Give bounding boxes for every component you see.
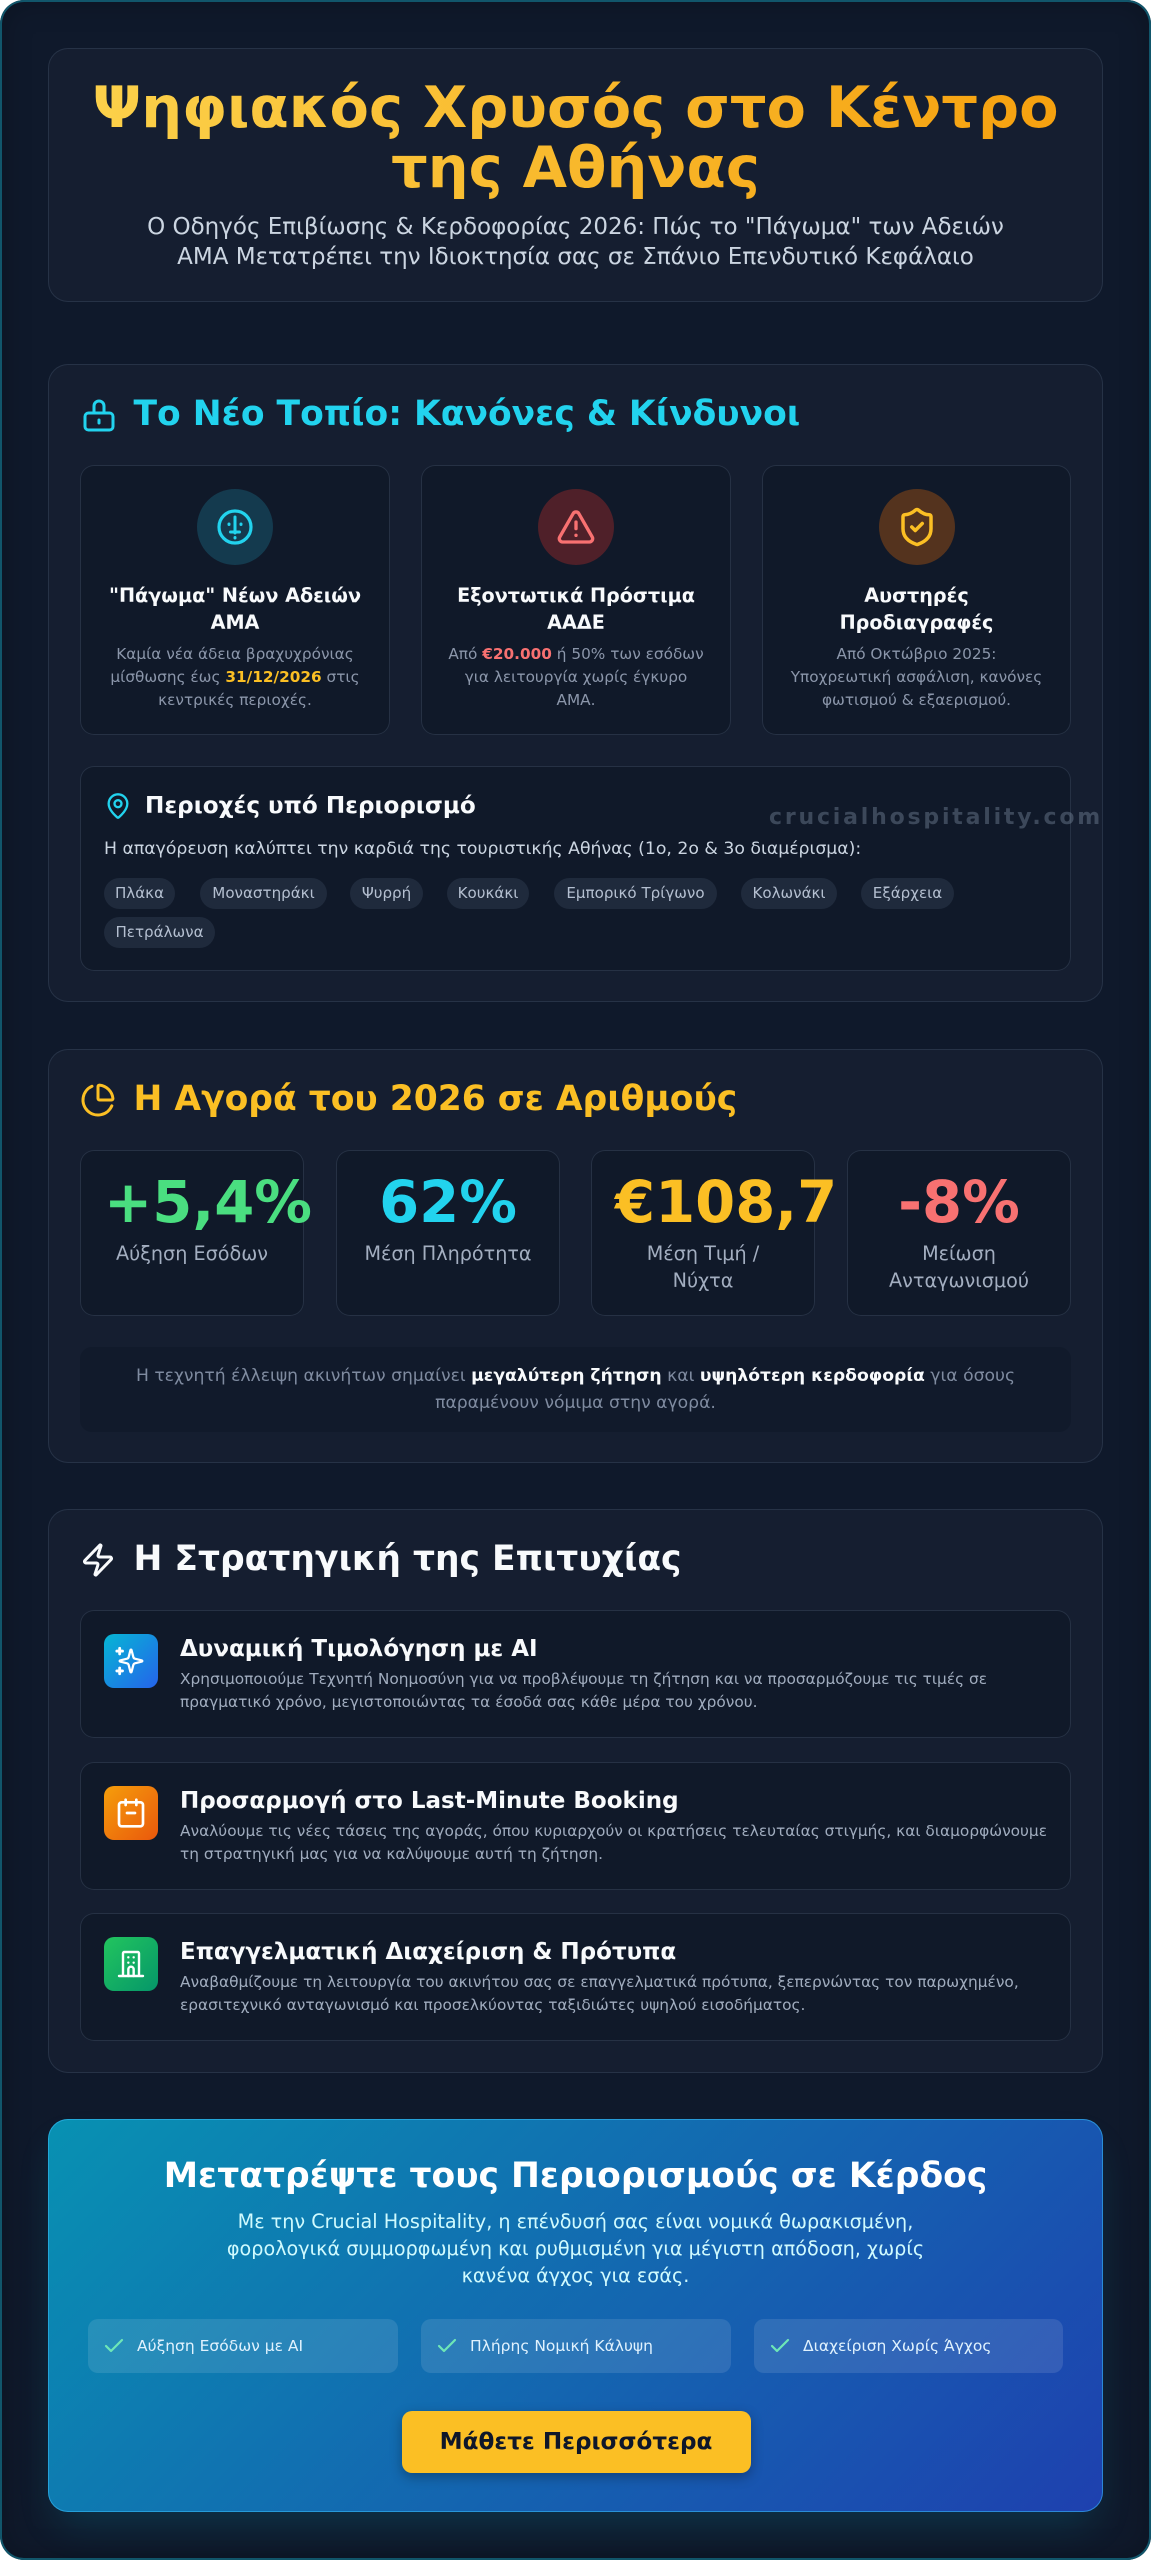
icon: lightning [83,1543,113,1577]
icon: lock [84,400,114,432]
card text: για λειτουργία χωρίς έγκυρο [465,668,687,686]
button: Μάθετε Περισσότερα [440,2429,712,2455]
feature: full legal coverage [421,2319,731,2373]
chip: Petralona [104,917,215,948]
card text: Από Οκτώβριο 2025: [837,645,996,663]
icon: check [105,2338,123,2352]
card text: Καμία νέα άδεια βραχυχρόνιας [116,645,354,663]
card title [840,584,993,634]
stat: revenue growth [80,1150,304,1316]
stat: occupancy [336,1150,560,1316]
strategy title: Επαγγελματική Διαχείριση & Πρότυπα [180,1939,676,1965]
strategy text: Αναβαθμίζουμε τη λειτουργία του ακινήτου σας σε επαγγελματικά πρότυπα, ξεπερνώντας τον παρωχημένο, [180,1973,1019,1991]
chip: Psyrri: Ψυρρή [362,884,411,902]
stat: competition reduction [847,1150,1071,1316]
card text: φωτισμού & εξαερισμού. [822,691,1011,709]
stat value: 62% [379,1169,517,1236]
stat value: -8% [898,1169,1020,1236]
panel: market in numbers [48,1049,1103,1463]
stat label: Ανταγωνισμού [889,1269,1029,1292]
chip: Petralona: Πετράλωνα [115,923,204,941]
panel: header [48,48,1103,302]
card text: Υποχρεωτική ασφάλιση, κανόνες [791,668,1042,686]
title [48,78,1103,199]
card title: Προδιαγραφές [840,611,993,634]
stat value: €108,7 [615,1169,837,1236]
card text [110,645,360,709]
chip: Exarchia [861,878,954,909]
CTA text: φορολογικά συμμορφωμένη και ρυθμισμένη για μέγιστη απόδοση, χωρίς [227,2237,924,2260]
callout: scarcity note: Η τεχνητή έλλειψη ακινήτων σημαίνει μεγαλύτερη ζήτηση και υψηλότερη κερδοφορία για όσους [136,1366,1015,1386]
card: strict specifications [762,465,1071,735]
strategy card: professional management [80,1913,1071,2041]
icon: frozen license [197,489,273,565]
chip: Commercial Triangle: Εμπορικό Τρίγωνο [566,884,705,902]
strategy text [180,1822,1047,1863]
strategy text: τη στρατηγική μας για να καλύψουμε αυτή τη ζήτηση. [180,1845,603,1863]
chip: Monastiraki: Μοναστηράκι [212,884,315,902]
areas heading: Περιοχές υπό Περιορισμό [145,793,476,819]
feature: revenue growth with AI [88,2319,398,2373]
panel: new landscape rules and risks [48,364,1103,1002]
chip: Kolonaki: Κολωνάκι [752,884,826,902]
card text: κεντρικές περιοχές. [158,691,312,709]
card title: Αυστηρές [864,584,969,607]
chip: Commercial Triangle [554,878,717,909]
chip: Plaka [104,878,175,909]
chip: Monastiraki [200,878,327,909]
icon: shield check [879,489,955,565]
button [402,2411,750,2473]
strategy text: πραγματικό χρόνο, μεγιστοποιώντας τα έσοδά σας κάθε μέρα του χρόνου. [180,1693,758,1711]
card title: "Πάγωμα" Νέων Αδειών [109,584,361,607]
feature text: Διαχείριση Χωρίς Άγχος [803,2337,991,2355]
card title: ΑΜΑ [211,611,259,634]
card title: ΑΑΔΕ [547,611,605,634]
stat: average price [591,1150,815,1316]
stat label: Μείωση [922,1242,996,1265]
subtitle [147,214,1004,270]
stat label: Αύξηση Εσόδων [116,1242,268,1265]
card title [109,584,361,634]
stat label [647,1242,760,1292]
subtitle: Ο Οδηγός Επιβίωσης & Κερδοφορίας 2026: Πώς το "Πάγωμα" των Αδειών [147,214,1004,240]
feature: stress-free management [754,2319,1063,2373]
strategy text [180,1973,1019,2014]
icon: check [438,2338,456,2352]
icon: check [770,2338,790,2352]
chip: Exarchia: Εξάρχεια [873,884,942,902]
strategy card: last-minute [80,1762,1071,1890]
watermark: crucialhospitality.com [769,805,1103,830]
stat label [889,1242,1029,1292]
card: license freeze [80,465,390,735]
subtitle: ΑΜΑ Μετατρέπει την Ιδιοκτησία σας σε Σπάνιο Επενδυτικό Κεφάλαιο [177,244,974,270]
panel: restricted areas [80,766,1071,971]
panel: strategy [48,1509,1103,2073]
card text: μίσθωσης έως 31/12/2026 στις [110,668,360,686]
icon: calendar [104,1786,158,1840]
feature text: Πλήρης Νομική Κάλυψη [470,2337,653,2355]
heading: new landscape: Το Νέο Τοπίο: Κανόνες & Κίνδυνοι [134,394,800,434]
panel: call to action [48,2119,1103,2512]
card title: Εξοντωτικά Πρόστιμα [457,584,695,607]
chip: Koukaki: Κουκάκι [458,884,518,902]
stat label: Μέση Τιμή / [647,1242,759,1265]
icon: pie chart [82,1084,114,1116]
heading: strategy: Η Στρατηγική της Επιτυχίας [134,1539,681,1579]
areas description: Η απαγόρευση καλύπτει την καρδιά της τουριστικής Αθήνας (1ο, 2ο & 3ο διαμέρισμα): [104,839,861,859]
CTA text: Με την Crucial Hospitality, η επένδυσή σας είναι νομικά θωρακισμένη, [238,2210,913,2233]
CTA text [227,2210,924,2287]
card text: ΑΜΑ. [556,691,596,709]
card title [457,584,695,634]
strategy text [180,1670,987,1711]
icon: map pin [108,793,128,819]
card: fines [421,465,731,735]
strategy text: Αναλύουμε τις νέες τάσεις της αγοράς, όπου κυριαρχούν οι κρατήσεις τελευταίας στιγμής, και διαμορφώνουμε [180,1822,1047,1840]
callout: scarcity note: παραμένουν νόμιμα στην αγορά. [435,1392,716,1412]
icon: building [104,1937,158,1991]
title: της Αθήνας [391,134,760,201]
card text: Από €20.000 ή 50% των εσόδων [448,645,704,663]
icon: sparkles [104,1634,158,1688]
feature text: Αύξηση Εσόδων με AI [137,2337,303,2355]
strategy text: ερασιτεχνικό ανταγωνισμό και προσελκύοντας ταξιδιώτες υψηλού εισοδήματος. [180,1996,805,2014]
stat label: Μέση Πληρότητα [364,1242,532,1265]
CTA text: κανένα άγχος για εσάς. [462,2264,689,2287]
chip: Psyrri [350,878,423,909]
stat label: Νύχτα [673,1269,733,1292]
title: Ψηφιακός Χρυσός στο Κέντρο [92,74,1059,141]
chip: Koukaki [447,878,529,909]
strategy card: AI pricing [80,1610,1071,1738]
card text [448,645,704,709]
stat value: +5,4% [104,1169,312,1236]
chip: Kolonaki [741,878,837,909]
strategy title: Προσαρμογή στο Last-Minute Booking [180,1788,679,1814]
CTA title: Μετατρέψτε τους Περιορισμούς σε Κέρδος [164,2156,987,2196]
icon: warning [538,489,614,565]
heading: market: Η Αγορά του 2026 σε Αριθμούς [134,1079,737,1119]
strategy title: Δυναμική Τιμολόγηση με AI [180,1636,538,1662]
callout: scarcity note [80,1347,1071,1432]
chip: Plaka: Πλάκα [115,884,164,902]
strategy text: Χρησιμοποιούμε Τεχνητή Νοημοσύνη για να προβλέψουμε τη ζήτηση και να προσαρμόζουμε τις τιμές σε [180,1670,987,1688]
card text [790,645,1042,709]
